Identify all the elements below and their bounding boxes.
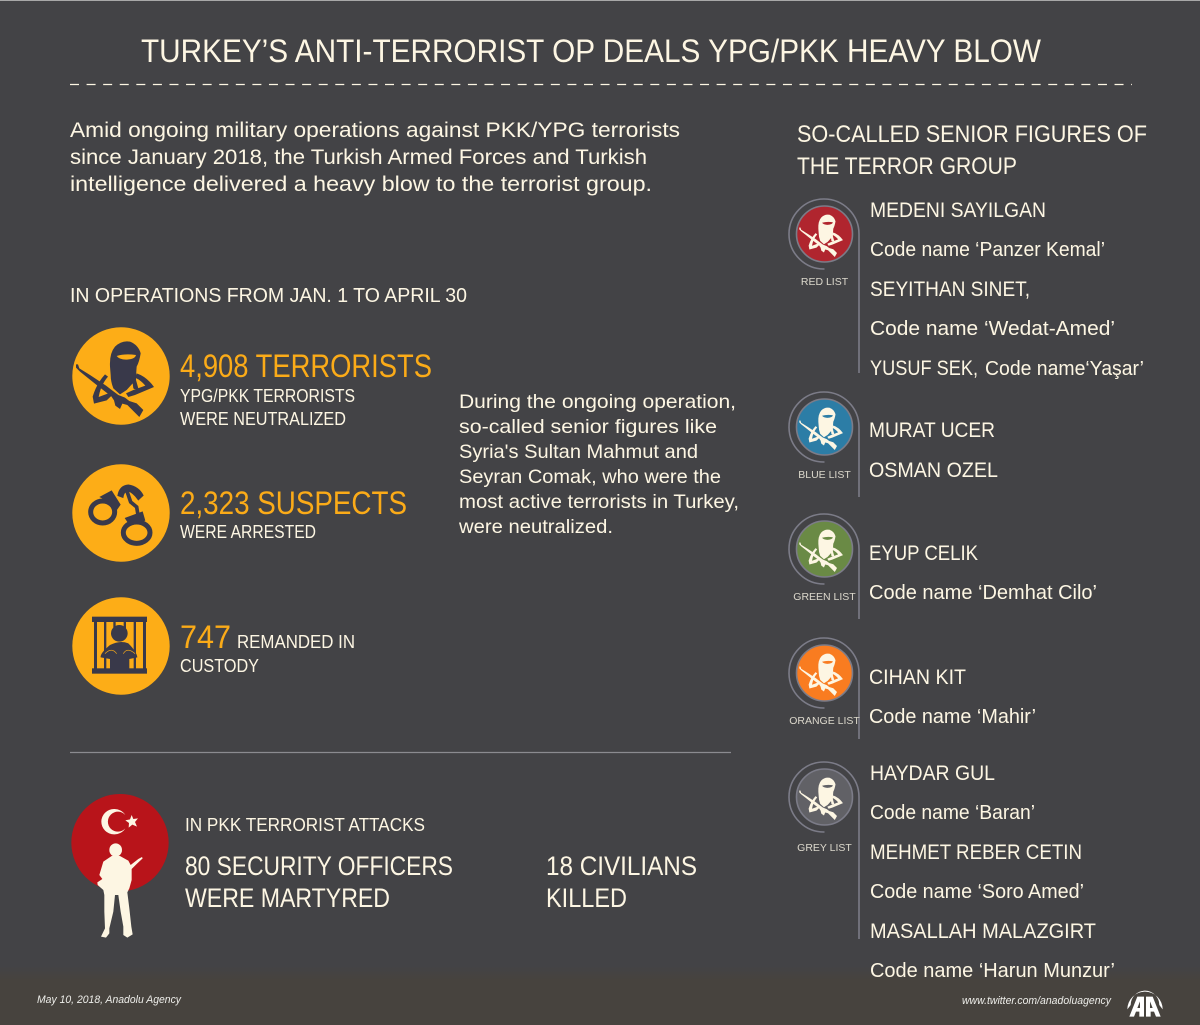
paragraph: ongoing operation [458, 391, 739, 538]
icon: soldier on Turkish flag [71, 794, 169, 938]
panel: green list [789, 514, 1097, 619]
panel: grey list: Code name ‘Baran’ [870, 802, 1035, 824]
panel: blue list: BLUE LIST [798, 469, 851, 481]
paragraph: ongoing operation: Syria's Sultan Mahmut and [459, 441, 698, 463]
panel: red list: Code name‘Yaşar’ [985, 358, 1144, 380]
panel: grey list: HAYDAR GUL [870, 762, 995, 785]
intro text [70, 119, 680, 196]
paragraph: ongoing operation: most active terrorists in Turkey, [459, 491, 739, 513]
senior figures heading [797, 121, 1147, 180]
panel: grey list [789, 762, 1115, 982]
panel: red list [789, 199, 1144, 380]
stat: security officers martyred: 80 SECURITY OFFICERS [185, 851, 453, 881]
panel: green list: Code name ‘Demhat Cilo’ [869, 582, 1097, 604]
paragraph: ongoing operation: Seyran Comak, who were the [459, 466, 721, 488]
attacks heading: IN PKK TERRORIST ATTACKS [185, 814, 425, 835]
stat: remanded in custody: REMANDED IN [237, 631, 355, 652]
stat: remanded in custody: CUSTODY [180, 655, 259, 676]
panel: red list: Code name ‘Wedat-Amed’ [870, 318, 1115, 340]
footer band [0, 966, 1200, 1025]
senior figures heading: SO-CALLED SENIOR FIGURES OF [797, 121, 1147, 148]
stat: terrorists neutralized [72, 327, 432, 429]
operations heading: IN OPERATIONS FROM JAN. 1 TO APRIL 30 [70, 285, 467, 307]
stat: civilians killed: 18 CIVILIANS [546, 851, 697, 881]
panel: green list: GREEN LIST [793, 591, 856, 603]
stat: security officers martyred [185, 851, 453, 913]
paragraph: ongoing operation: During the ongoing operation, [459, 391, 736, 413]
stat: terrorists neutralized: WERE NEUTRALIZED [180, 408, 346, 429]
stat: remanded in custody [72, 597, 355, 695]
icon: armed terrorist [72, 327, 170, 425]
panel: orange list: Code name ‘Mahir’ [869, 706, 1036, 728]
panel: red list: SEYITHAN SINET, [870, 278, 1030, 301]
intro text: since January 2018, the Turkish Armed Forces and Turkish [70, 146, 647, 169]
panel: blue list [789, 392, 998, 497]
panel: orange list: CIHAN KIT [869, 666, 966, 689]
footer twitter: www.twitter.com/anadoluagency [962, 995, 1112, 1007]
stat: suspects arrested: 2,323 SUSPECTS [180, 485, 407, 521]
stat: civilians killed: KILLED [546, 883, 627, 913]
stat: suspects arrested [72, 464, 407, 562]
icon: Anadolu Agency logo [1127, 991, 1163, 1017]
panel: grey list: GREY LIST [797, 842, 852, 854]
senior figures heading: THE TERROR GROUP [797, 153, 1017, 180]
panel: grey list: Code name ‘Harun Munzur’ [870, 960, 1115, 982]
panel: green list: EYUP CELIK [869, 542, 978, 565]
paragraph: ongoing operation: so-called senior figures like [459, 416, 717, 438]
panel: orange list: ORANGE LIST [789, 715, 860, 727]
panel: orange list [789, 638, 1036, 739]
panel: grey list: MASALLAH MALAZGIRT [870, 920, 1096, 943]
panel: red list: Code name ‘Panzer Kemal’ [870, 239, 1105, 261]
stat: security officers martyred: WERE MARTYRED [185, 883, 390, 913]
stat: terrorists neutralized: YPG/PKK TERRORISTS [180, 385, 355, 406]
intro text: Amid ongoing military operations against PKK/YPG terrorists [70, 119, 680, 142]
panel: grey list: MEHMET REBER CETIN [870, 841, 1082, 864]
intro text: intelligence delivered a heavy blow to the terrorist group. [70, 173, 652, 196]
footer date: May 10, 2018, Anadolu Agency [37, 994, 182, 1006]
panel: blue list: MURAT UCER [869, 419, 995, 442]
stat: civilians killed [546, 851, 697, 913]
panel: red list: YUSUF SEK, [870, 357, 978, 380]
paragraph: ongoing operation: were neutralized. [458, 516, 613, 538]
stat: suspects arrested: WERE ARRESTED [180, 521, 316, 542]
panel: red list: MEDENI SAYILGAN [870, 199, 1046, 222]
panel: red list: RED LIST [801, 276, 849, 288]
top edge [0, 0, 1200, 1]
stat: remanded in custody: 747 [180, 619, 231, 655]
panel: blue list: OSMAN OZEL [869, 459, 998, 482]
stat: terrorists neutralized: 4,908 TERRORISTS [180, 348, 432, 384]
icon: prisoner behind bars [72, 597, 170, 695]
title: TURKEY’S ANTI-TERRORIST OP DEALS YPG/PKK HEAVY BLOW [141, 33, 1042, 69]
panel: grey list: Code name ‘Soro Amed’ [870, 881, 1084, 903]
icon: handcuffs [72, 464, 170, 562]
